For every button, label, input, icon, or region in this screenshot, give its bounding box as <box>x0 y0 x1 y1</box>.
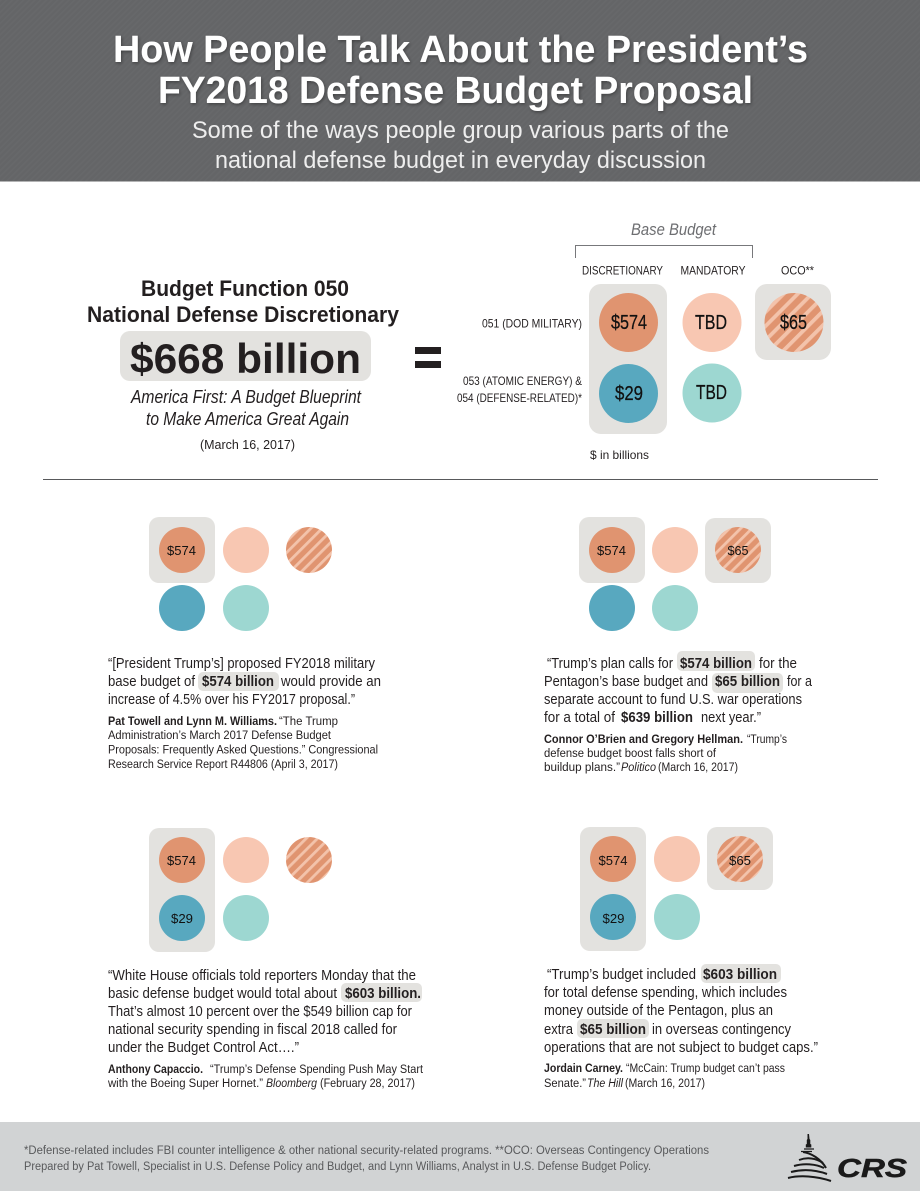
quote: base budget of <box>108 674 196 690</box>
icon matrix: $65 <box>728 543 748 558</box>
column headers: DISCRETIONARY <box>582 264 663 278</box>
quote: “Trump’s budget included <box>547 967 696 983</box>
budget function heading: Budget Function 050 <box>141 276 349 301</box>
quote: Pentagon’s base budget and <box>544 674 708 690</box>
budget function heading: National Defense Discretionary <box>87 302 400 327</box>
title <box>113 29 808 112</box>
circle: 051 discretionary: $574 <box>611 312 647 334</box>
citation: buildup plans.” <box>544 760 620 774</box>
quote: basic defense budget would total about <box>108 986 337 1002</box>
quote: $574 billion <box>680 656 752 672</box>
citation: with the Boeing Super Hornet.” <box>107 1076 263 1090</box>
citation: Politico <box>621 760 656 774</box>
citation: Jordain Carney. <box>544 1061 623 1075</box>
quote: next year.” <box>701 710 761 726</box>
circle: 051 discretionary <box>599 293 658 352</box>
panel: basic defense budget <box>107 828 424 1090</box>
total amount pill: $668 billion <box>130 335 361 382</box>
quote: extra <box>544 1022 574 1038</box>
quote: for the <box>759 656 797 672</box>
circle: OCO: $65 <box>780 312 807 334</box>
citation: Anthony Capaccio. <box>108 1062 203 1076</box>
circle: 051 mandatory <box>682 293 742 352</box>
row labels: 054 (DEFENSE-RELATED)* <box>457 391 582 405</box>
source text: America First: A Budget Blueprint <box>130 387 362 407</box>
citation: The Hill <box>587 1076 623 1090</box>
circle: 053/054 discretionary: $29 <box>615 383 643 405</box>
circle: 053/054 mandatory: TBD <box>696 382 727 404</box>
citation: Administration’s March 2017 Defense Budget <box>108 728 332 742</box>
icon matrix: $574 <box>597 543 626 558</box>
footnotes: Prepared by Pat Towell, Specialist in U.S. Defense Policy and Budget, and Lynn Williams, Analyst in U.S. Defense Budget Policy. <box>24 1161 651 1173</box>
circle: 053/054 mandatory <box>682 364 742 422</box>
icon: CRS capitol logo: CRS <box>837 1153 908 1183</box>
citation: “Trump’s Defense Spending Push May Start <box>210 1062 424 1076</box>
citation: Senate.” <box>544 1076 586 1090</box>
column headers: OCO** <box>781 264 814 278</box>
quote: for a total of <box>544 710 616 726</box>
citation: defense budget boost falls short of <box>544 746 717 760</box>
quote: $65 billion <box>715 674 780 690</box>
quote: national security spending in fiscal 2018 called for <box>108 1022 397 1038</box>
circle: OCO <box>764 293 824 352</box>
citation: Proposals: Frequently Asked Questions.” Congressional <box>108 742 378 756</box>
citation: “McCain: Trump budget can’t pass <box>626 1061 785 1075</box>
icon matrix: $574 <box>167 543 196 558</box>
quote <box>544 651 813 726</box>
title: How People Talk About the President’s <box>113 29 808 71</box>
title: FY2018 Defense Budget Proposal <box>158 70 753 112</box>
panel: base budget plus OCO <box>544 517 813 774</box>
column headers <box>582 264 814 278</box>
icon matrix <box>579 517 771 631</box>
units note: $ in billions <box>590 448 649 462</box>
quote: $603 billion. <box>345 986 421 1002</box>
quote: would provide an <box>280 674 381 690</box>
panel: total defense spending <box>544 827 818 1090</box>
row labels: 053 (ATOMIC ENERGY) & <box>463 374 582 388</box>
quote <box>108 656 381 708</box>
citation: Research Service Report R44806 (April 3, 2017) <box>108 757 338 771</box>
quote <box>544 964 818 1056</box>
quote: $639 billion <box>621 710 693 726</box>
source text: (March 16, 2017) <box>200 437 295 452</box>
icon matrix: $574 <box>167 853 196 868</box>
icon: CRS capitol logo <box>788 1134 908 1183</box>
footnotes: *Defense-related includes FBI counter intelligence & other national security-related programs. **OCO: Overseas Contingency Operations <box>24 1145 709 1157</box>
citation <box>544 732 787 774</box>
footer <box>0 1122 920 1191</box>
citation <box>544 1061 785 1090</box>
citation: Bloomberg <box>266 1076 317 1090</box>
subtitle: Some of the ways people group various parts of the <box>192 117 729 144</box>
quote: increase of 4.5% over his FY2017 proposal.” <box>108 692 355 708</box>
quote: money outside of the Pentagon, plus an <box>544 1003 773 1019</box>
citation <box>108 714 378 771</box>
citation: (February 28, 2017) <box>320 1076 415 1090</box>
subtitle <box>192 117 729 174</box>
icon matrix: $29 <box>602 911 624 926</box>
source text <box>130 387 362 452</box>
icon matrix <box>149 828 332 952</box>
source text: to Make America Great Again <box>146 409 349 429</box>
icon matrix: $574 <box>598 853 628 868</box>
quote: $65 billion <box>580 1022 646 1038</box>
subtitle: national defense budget in everyday discussion <box>215 147 706 174</box>
icon matrix: $65 <box>729 853 751 868</box>
icon matrix <box>149 517 332 631</box>
row labels <box>457 316 582 405</box>
quote: operations that are not subject to budget caps.” <box>544 1040 818 1056</box>
header banner <box>0 0 920 182</box>
footnotes <box>24 1145 709 1173</box>
quote: separate account to fund U.S. war operations <box>544 692 802 708</box>
quote: for a <box>787 674 813 690</box>
equals sign <box>415 347 441 368</box>
circle: 053/054 discretionary <box>599 364 658 423</box>
citation: (March 16, 2017) <box>625 1076 705 1090</box>
base budget bracket: Base Budget <box>631 220 717 239</box>
quote: “White House officials told reporters Monday that the <box>108 968 416 984</box>
quote: “[President Trump’s] proposed FY2018 military <box>108 656 376 672</box>
citation: “Trump’s <box>747 732 787 746</box>
citation <box>107 1062 424 1090</box>
quote: $574 billion <box>202 674 274 690</box>
quote: under the Budget Control Act….” <box>108 1040 299 1056</box>
icon matrix: $29 <box>171 911 193 926</box>
budget function heading <box>87 276 400 327</box>
quote: for total defense spending, which includes <box>544 985 787 1001</box>
quote <box>108 968 422 1056</box>
budget matrix chart <box>457 220 831 462</box>
quote: “Trump’s plan calls for <box>547 656 673 672</box>
quote: That’s almost 10 percent over the $549 billion cap for <box>108 1004 412 1020</box>
quote: $603 billion <box>703 967 777 983</box>
base budget bracket <box>576 220 752 258</box>
icon matrix <box>580 827 773 951</box>
citation: Connor O’Brien and Gregory Hellman. <box>544 732 743 746</box>
row labels: 051 (DOD MILITARY) <box>482 316 582 330</box>
quote: in overseas contingency <box>652 1022 792 1038</box>
citation: (March 16, 2017) <box>658 760 738 774</box>
circle: 051 mandatory: TBD <box>695 312 727 334</box>
citation: Pat Towell and Lynn M. Williams. <box>108 714 277 728</box>
column headers: MANDATORY <box>680 264 746 278</box>
citation: “The Trump <box>279 714 338 728</box>
panel: military base budget <box>108 517 381 771</box>
